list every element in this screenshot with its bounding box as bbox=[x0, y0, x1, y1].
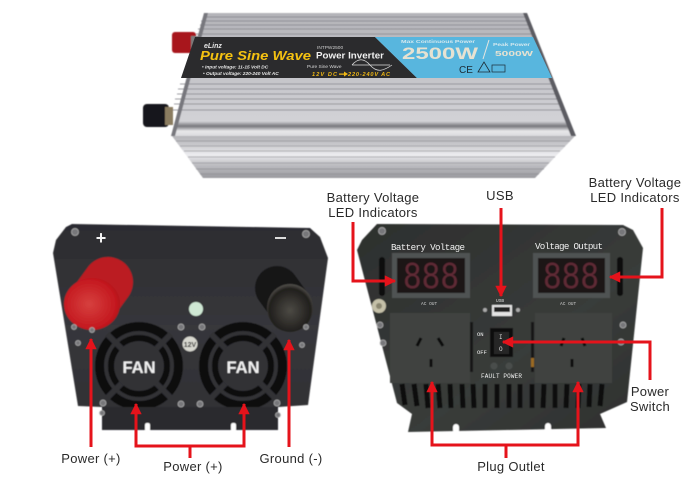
fan grille left: FAN bbox=[122, 358, 156, 377]
12V badge: 12V bbox=[184, 342, 197, 349]
arrows bbox=[91, 208, 662, 458]
arrow: USB bbox=[500, 208, 502, 296]
label: ground: Ground (-) bbox=[260, 451, 322, 466]
indicator lights bbox=[490, 362, 512, 370]
label: power plus center: Power (+) bbox=[163, 459, 223, 474]
label: plug outlet: Plug Outlet bbox=[477, 459, 545, 474]
label: right battery voltage LED: Battery Voltage bbox=[589, 175, 681, 190]
fan grille right: FAN bbox=[226, 358, 260, 377]
panel printed text: Battery Voltage bbox=[391, 242, 465, 253]
panel printed text: O bbox=[499, 346, 503, 353]
black ground terminal bbox=[267, 284, 313, 332]
arrow: right LED indicators bbox=[610, 208, 662, 277]
minus sign bbox=[275, 237, 286, 239]
sine wave note: Pure Sine Wave bbox=[307, 64, 342, 70]
black negative terminal bbox=[143, 104, 173, 127]
panel printed text: ON bbox=[477, 331, 484, 338]
model number: INTPW2500 bbox=[317, 45, 343, 51]
slash divider bbox=[483, 40, 489, 59]
mounting slots bbox=[145, 423, 236, 431]
front panel of inverter bbox=[357, 224, 643, 433]
rear panel of inverter bbox=[53, 224, 328, 431]
heading: power inverter: Power Inverter bbox=[316, 50, 385, 60]
arrow: power plus fans bbox=[136, 404, 244, 458]
label: left battery voltage LED: LED Indicators bbox=[328, 205, 418, 220]
vertical perforations beside switch bbox=[470, 322, 534, 372]
ventilation slots bbox=[402, 384, 602, 408]
side slots bbox=[379, 257, 623, 296]
USB port bbox=[483, 305, 520, 316]
screws bbox=[377, 228, 626, 346]
label: left battery voltage LED: Battery Voltage bbox=[327, 190, 419, 205]
front face bbox=[172, 136, 575, 178]
label: right battery voltage LED: LED Indicators bbox=[590, 190, 680, 205]
socket right bbox=[535, 313, 612, 383]
panel printed text: OFF bbox=[477, 349, 487, 356]
red positive terminal bbox=[172, 32, 199, 53]
voltage conversion: 12V DC bbox=[312, 72, 338, 78]
sine wave icon bbox=[352, 60, 392, 70]
power switch bbox=[490, 328, 513, 357]
label: dark section bbox=[181, 37, 417, 78]
arrow: power switch bbox=[503, 342, 650, 380]
red power terminal bbox=[64, 278, 120, 330]
plus sign: + bbox=[96, 228, 106, 248]
top view: power inverter unit bbox=[143, 13, 576, 178]
display: voltage output: 888 bbox=[543, 257, 599, 300]
label: USB: USB bbox=[486, 188, 514, 203]
max continuous power: Max Continuous Power bbox=[401, 39, 475, 44]
display: battery voltage: 888 bbox=[403, 257, 459, 300]
heading: pure sine wave: Pure Sine Wave bbox=[200, 48, 311, 63]
panel printed text: FAULT POWER bbox=[481, 373, 522, 380]
fan grille right bbox=[199, 322, 287, 410]
mounting bracket bbox=[102, 407, 278, 430]
certification marks bbox=[459, 62, 505, 76]
voltage conversion bbox=[312, 72, 391, 78]
socket left bbox=[390, 313, 470, 383]
panel printed text bbox=[391, 241, 603, 380]
certification marks: CE bbox=[459, 65, 473, 76]
voltage specs bbox=[202, 64, 279, 77]
5000W: 5000W bbox=[495, 49, 533, 58]
arrow: ground bbox=[288, 340, 290, 447]
label: blue section bbox=[375, 37, 552, 78]
label: power switch: Switch bbox=[630, 399, 670, 414]
brand: eLinz bbox=[204, 43, 222, 50]
label: power switch: Power bbox=[631, 384, 669, 399]
voltage conversion: 220-240V AC bbox=[347, 72, 391, 78]
2500W: 2500W bbox=[402, 44, 479, 63]
screws bbox=[72, 228, 310, 418]
panel printed text: I bbox=[499, 334, 503, 341]
green indicator light bbox=[189, 302, 203, 316]
panel printed text: AC OUT bbox=[560, 301, 577, 307]
label: power plus left: Power (+) bbox=[61, 451, 121, 466]
mounting slots bbox=[453, 423, 551, 433]
rear metal plate bbox=[53, 224, 328, 430]
labels bbox=[61, 175, 681, 474]
arrow: left LED indicators bbox=[353, 222, 395, 281]
panel printed text: USB bbox=[496, 298, 504, 304]
12V badge bbox=[182, 336, 198, 352]
terminal post bbox=[372, 299, 386, 313]
front metal plate bbox=[357, 224, 643, 432]
aluminium top face bbox=[172, 13, 575, 136]
panel printed text: Voltage Output bbox=[535, 241, 603, 252]
arrow: power plus terminal bbox=[90, 339, 92, 447]
fan grille left bbox=[95, 322, 183, 410]
voltage specs: • Output voltage: 220-240 Volt AC bbox=[203, 71, 279, 77]
voltage specs: • Input voltage: 11-15 Volt DC bbox=[202, 64, 269, 70]
arrow: plug outlet bbox=[432, 382, 578, 458]
panel printed text: AC OUT bbox=[421, 301, 438, 307]
peak power: Peak Power bbox=[493, 42, 530, 47]
